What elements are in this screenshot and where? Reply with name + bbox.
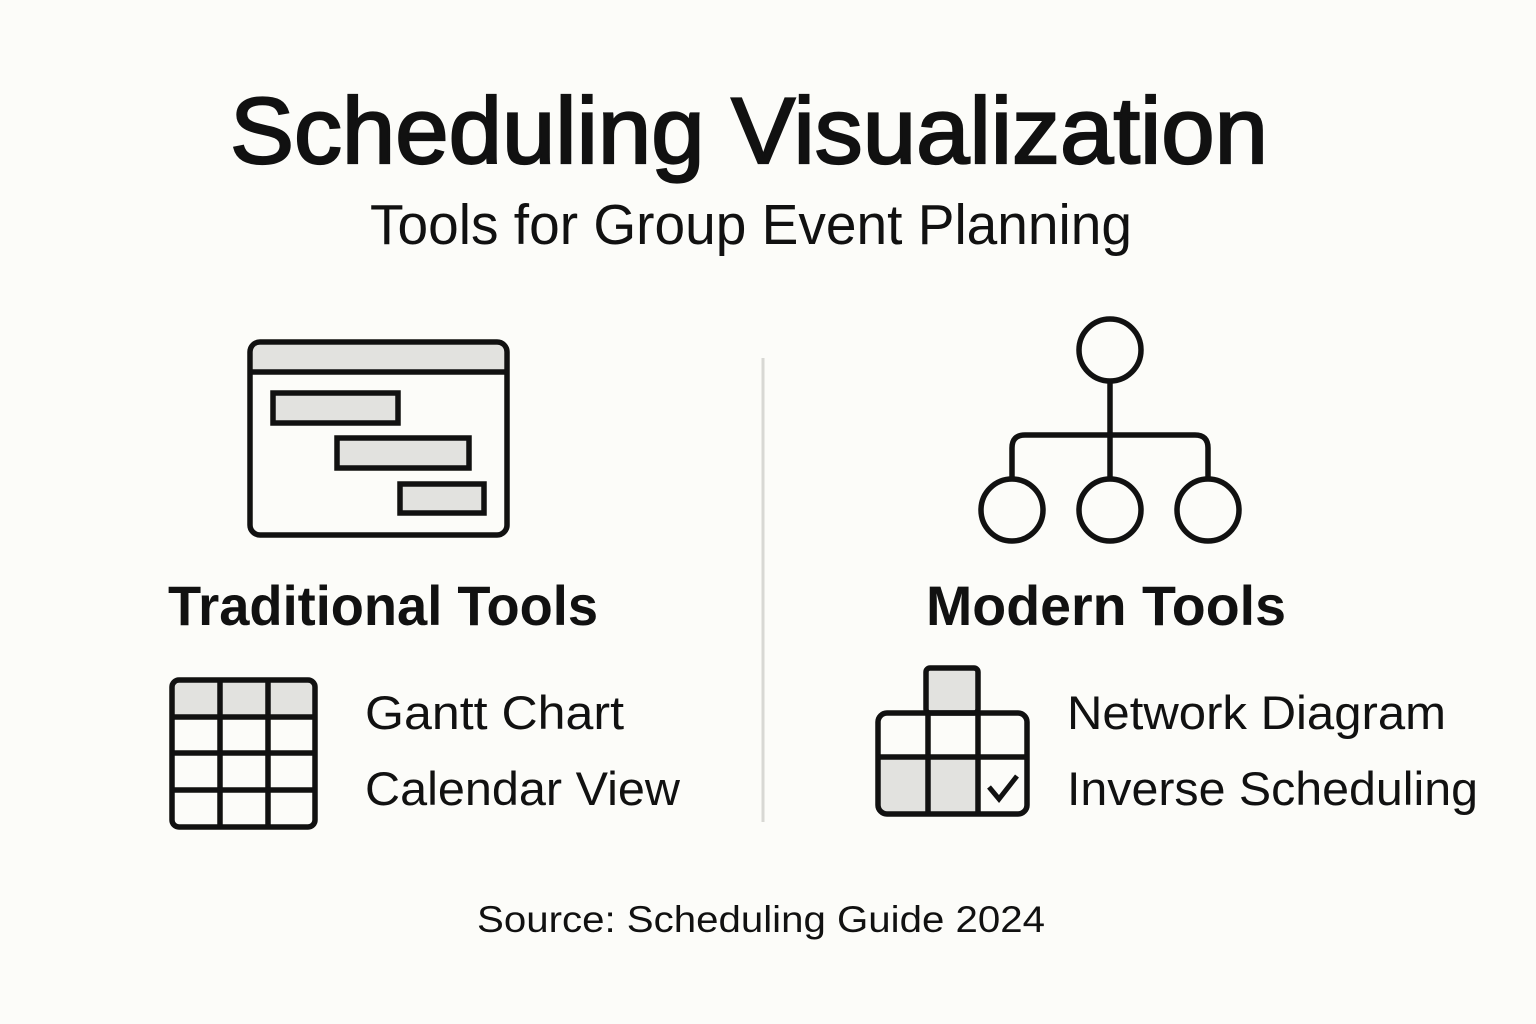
- text: inverse scheduling: Inverse Scheduling: [1067, 762, 1478, 815]
- panel: modern tools: [878, 319, 1478, 815]
- panel: traditional tools: [168, 342, 681, 827]
- icon: gantt chart window: [250, 342, 507, 535]
- text: network diagram: Network Diagram: [1067, 686, 1446, 739]
- icon: network hierarchy: [981, 319, 1239, 541]
- text: calendar view: Calendar View: [365, 762, 681, 815]
- title: Scheduling Visualization: [230, 78, 1268, 183]
- icon: inverse schedule grid: [878, 668, 1027, 814]
- text: gantt chart: Gantt Chart: [365, 686, 624, 739]
- heading: traditional tools: Traditional Tools: [168, 574, 598, 637]
- icon: calendar grid: [172, 680, 315, 827]
- source note: Source: Scheduling Guide 2024: [477, 899, 1045, 940]
- subtitle: Tools for Group Event Planning: [370, 193, 1132, 257]
- heading: modern tools: Modern Tools: [926, 574, 1286, 637]
